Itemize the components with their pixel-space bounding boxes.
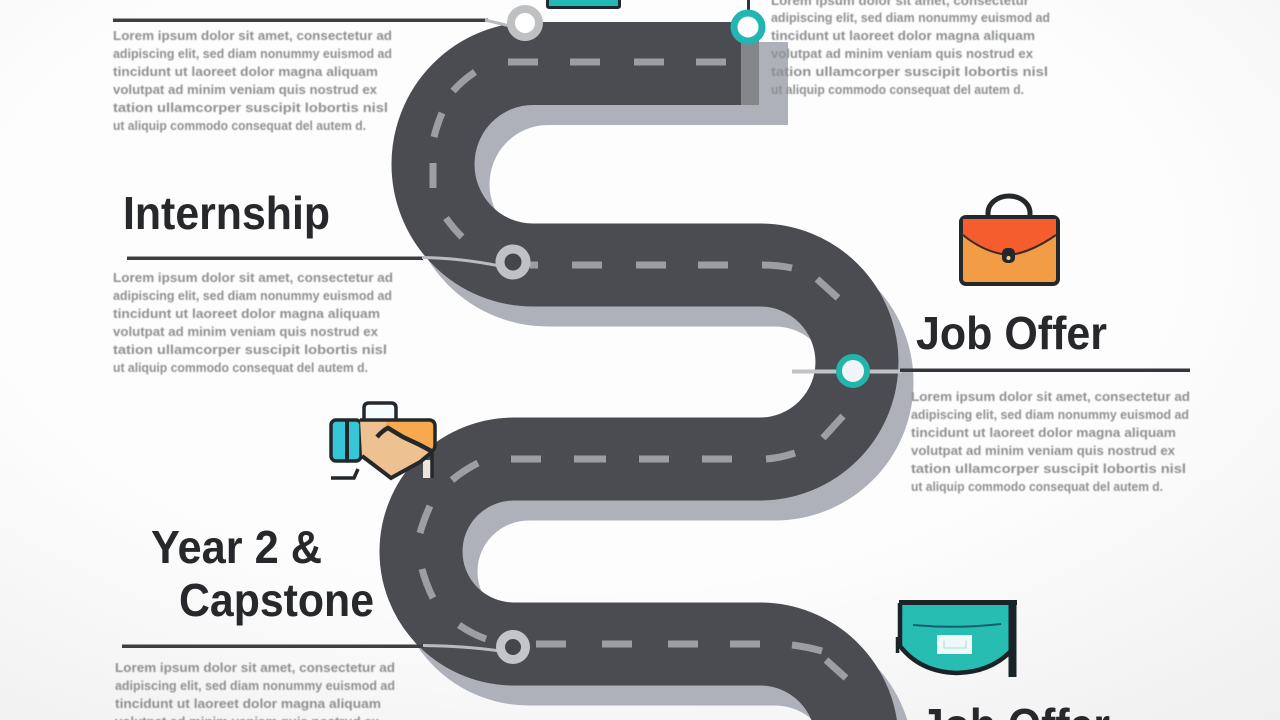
text block: Internship: ut aliquip commodo consequat del autem d. <box>113 360 368 375</box>
text block: top left: ut aliquip commodo consequat del autem d. <box>113 118 366 133</box>
text block: top right: adipiscing elit, sed diam nonummy euismod ad <box>771 10 1050 25</box>
text block: Job Offer: tincidunt ut laoreet dolor magna aliquam <box>911 425 1176 440</box>
text block: Year 2: tincidunt ut laoreet dolor magna aliquam <box>115 696 381 711</box>
text block: top left: tincidunt ut laoreet dolor magna aliquam <box>113 64 378 79</box>
icon: handshake briefcase <box>331 403 435 478</box>
text block: Job Offer: adipiscing elit, sed diam nonummy euismod ad <box>911 407 1189 422</box>
text block: top right: tation ullamcorper suscipit lobortis nisl <box>771 64 1048 79</box>
text block: top right: volutpat ad minim veniam quis nostrud ex <box>771 46 1034 61</box>
text block: top right <box>771 0 1050 97</box>
text block: top left: adipiscing elit, sed diam nonummy euismod ad <box>113 46 392 61</box>
icon: orange briefcase <box>961 196 1058 284</box>
milestone connector: top left <box>113 18 510 26</box>
icon: top partial briefcase <box>546 0 621 9</box>
text block: Internship: adipiscing elit, sed diam nonummy euismod ad <box>113 288 392 303</box>
text block: top right: tincidunt ut laoreet dolor magna aliquam <box>771 28 1035 43</box>
text block: Internship: volutpat ad minim veniam quis nostrud ex <box>113 324 379 339</box>
text block: Job Offer: volutpat ad minim veniam quis nostrud ex <box>911 443 1176 458</box>
milestone node: Year 2 <box>500 634 526 660</box>
text block: Job Offer: ut aliquip commodo consequat del autem d. <box>911 479 1163 494</box>
heading: Job Offer: Job Offer <box>916 307 1107 359</box>
text block: Internship: tation ullamcorper suscipit lobortis nisl <box>113 342 387 357</box>
icon: graduation cap <box>898 602 1017 677</box>
heading: Year 2 & Capstone: Year 2 & <box>151 521 322 573</box>
text block: top left: tation ullamcorper suscipit lobortis nisl <box>113 100 388 115</box>
text block: Internship <box>113 270 393 375</box>
milestone node: top left <box>511 9 539 37</box>
text block: top left <box>113 28 392 133</box>
milestone node: top right <box>734 13 762 41</box>
heading: Year 2 & Capstone <box>151 521 374 626</box>
text block: Job Offer: Lorem ipsum dolor sit amet, consectetur ad <box>911 389 1190 404</box>
text block: top left: Lorem ipsum dolor sit amet, consectetur ad <box>113 28 392 43</box>
connector stem: top right <box>747 0 750 10</box>
text block: Year 2: Lorem ipsum dolor sit amet, consectetur ad <box>115 660 395 675</box>
road shadow <box>436 84 872 720</box>
road end cap <box>741 30 759 105</box>
milestone connector: Year 2 <box>122 644 500 651</box>
milestone connector: Job Offer <box>792 368 1190 374</box>
milestone connector: Internship <box>127 256 500 266</box>
text block: Internship: Lorem ipsum dolor sit amet, consectetur ad <box>113 270 393 285</box>
text block: top left: volutpat ad minim veniam quis nostrud ex <box>113 82 378 97</box>
heading: Internship: Internship <box>123 187 330 239</box>
text block: Year 2 <box>115 660 395 720</box>
text block: Job Offer: tation ullamcorper suscipit lobortis nisl <box>911 461 1186 476</box>
text block: Job Offer <box>911 389 1190 494</box>
text block: Internship: tincidunt ut laoreet dolor magna aliquam <box>113 306 380 321</box>
lane markings <box>420 62 846 678</box>
text block: Year 2: adipiscing elit, sed diam nonummy euismod ad <box>115 678 395 693</box>
milestone node: Job Offer <box>839 357 867 385</box>
road <box>420 30 857 720</box>
text block: top right: ut aliquip commodo consequat del autem d. <box>771 82 1024 97</box>
milestone node: Internship <box>500 249 526 275</box>
heading: Year 2 & Capstone: Capstone <box>179 574 374 626</box>
